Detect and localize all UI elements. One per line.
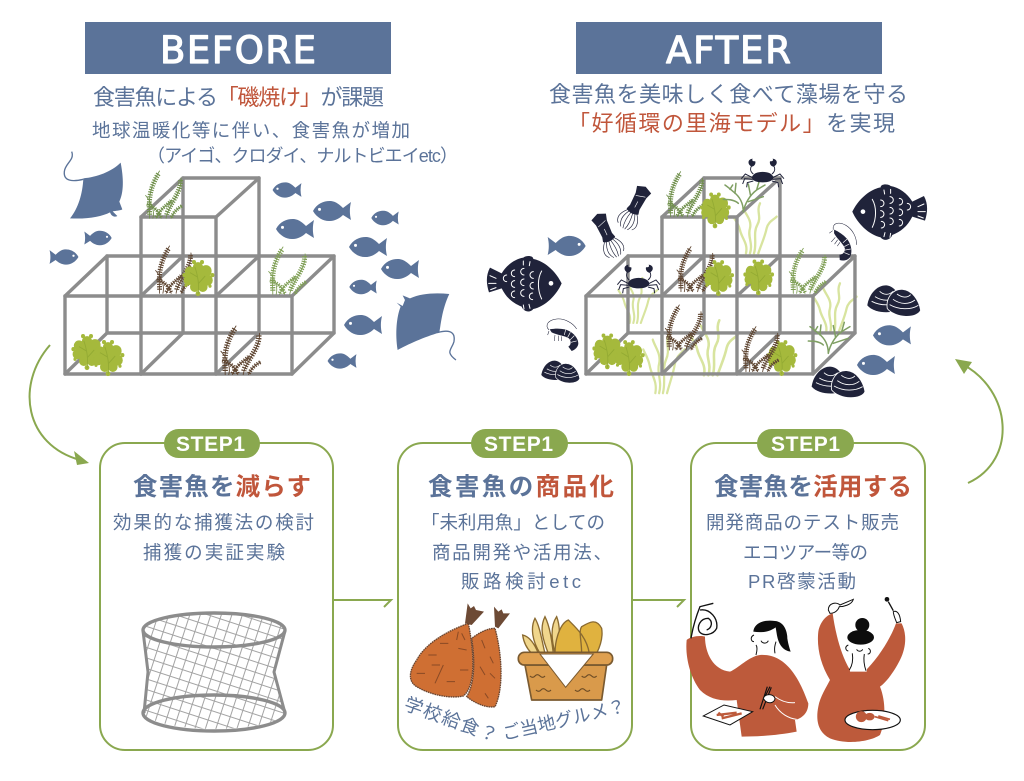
person left [686, 603, 808, 737]
badge: STEP1 [164, 429, 260, 458]
panel: before header [85, 22, 458, 166]
fried shrimp front [410, 603, 484, 697]
clams right upper [867, 285, 921, 316]
shrimp lower left [547, 319, 578, 351]
connector arrow 2 [632, 600, 684, 607]
panel: step 1 reduce fish [100, 429, 333, 750]
banner: BEFORE [85, 22, 391, 74]
clams right lower [812, 367, 865, 398]
seaweed in before cage [71, 171, 306, 376]
crab middle [617, 265, 660, 293]
cage structure [65, 178, 334, 374]
text block: commercialize: 販路検討etc [461, 571, 581, 592]
illustration: people eating [686, 597, 905, 742]
badge: STEP1: STEP1 [484, 433, 553, 456]
squid lower [588, 210, 627, 261]
badge: STEP1: STEP1 [176, 433, 245, 456]
heading: utilize: 食害魚を活用する [714, 473, 912, 501]
text block: utilize [706, 512, 899, 592]
clams left [541, 361, 580, 383]
heading: reduce fish: 食害魚を減らす [133, 473, 311, 501]
crab top [741, 159, 784, 187]
heading: after goal: 食害魚を美味しく食べて藻場を守る [549, 82, 908, 107]
banner: AFTER: AFTER [666, 29, 791, 72]
heading: commercialize: 食害魚の商品化 [428, 473, 614, 501]
cage structure [586, 178, 855, 374]
icon: fish trap net [143, 613, 285, 731]
kelp behind cage [618, 203, 857, 393]
big dark fish left [487, 256, 562, 311]
illustration: fried fish and basket [410, 603, 613, 707]
connector arrow 1 [333, 600, 391, 607]
panel: after header [549, 22, 908, 136]
seaweed in after cage [592, 172, 850, 376]
banner: AFTER [576, 22, 882, 74]
squid upper [615, 182, 655, 233]
icon: manta ray left [64, 152, 123, 219]
text block: reduce fish: 捕獲の実証実験 [143, 542, 285, 563]
person right [817, 597, 905, 742]
text block: utilize: エコツアー等の [743, 542, 868, 563]
panel: step 3 utilize [686, 429, 925, 750]
badge: STEP1 [757, 429, 854, 458]
basket of fried food [518, 617, 613, 700]
text block: commercialize: 「未利用魚」としての [421, 512, 605, 533]
text block: reduce fish [113, 512, 314, 563]
shrimp upper right [820, 220, 864, 264]
text block: before description: 地球温暖化等に伴い、食害魚が増加 [92, 120, 410, 141]
illustration: before reef cage [65, 171, 334, 376]
banner: BEFORE: BEFORE [160, 29, 316, 72]
text block: commercialize: 商品開発や活用法、 [432, 542, 612, 563]
heading: after model: 「好循環の里海モデル」を実現 [568, 111, 895, 136]
illustration: after reef cage [487, 159, 927, 398]
arrow: step to after [955, 359, 1003, 483]
heading: before problem: 食害魚による「磯焼け」が課題 [93, 85, 384, 110]
text block: reduce fish: 効果的な捕獲法の検討 [113, 512, 314, 533]
badge: STEP1: STEP1 [771, 433, 840, 456]
big dark fish right [852, 184, 927, 240]
text block: commercialize [421, 512, 612, 592]
icon: manta ray right [396, 293, 456, 360]
panel: step 2 commercialize [398, 429, 632, 750]
text block: utilize: PR啓蒙活動 [748, 571, 856, 592]
label: school lunch: 学校給食？ [402, 693, 501, 746]
fish school: before [50, 182, 419, 369]
badge: STEP1 [471, 429, 568, 458]
label: local gourmet: ご当地グルメ？ [500, 696, 628, 744]
text block: before description: （アイゴ、クロダイ、ナルトビエイetc） [147, 146, 458, 166]
arrow: before to step [30, 345, 89, 465]
fried shrimp back [467, 607, 510, 707]
text block: before description [92, 120, 458, 166]
blue fish after [548, 236, 911, 375]
text block: utilize: 開発商品のテスト販売 [706, 512, 899, 533]
